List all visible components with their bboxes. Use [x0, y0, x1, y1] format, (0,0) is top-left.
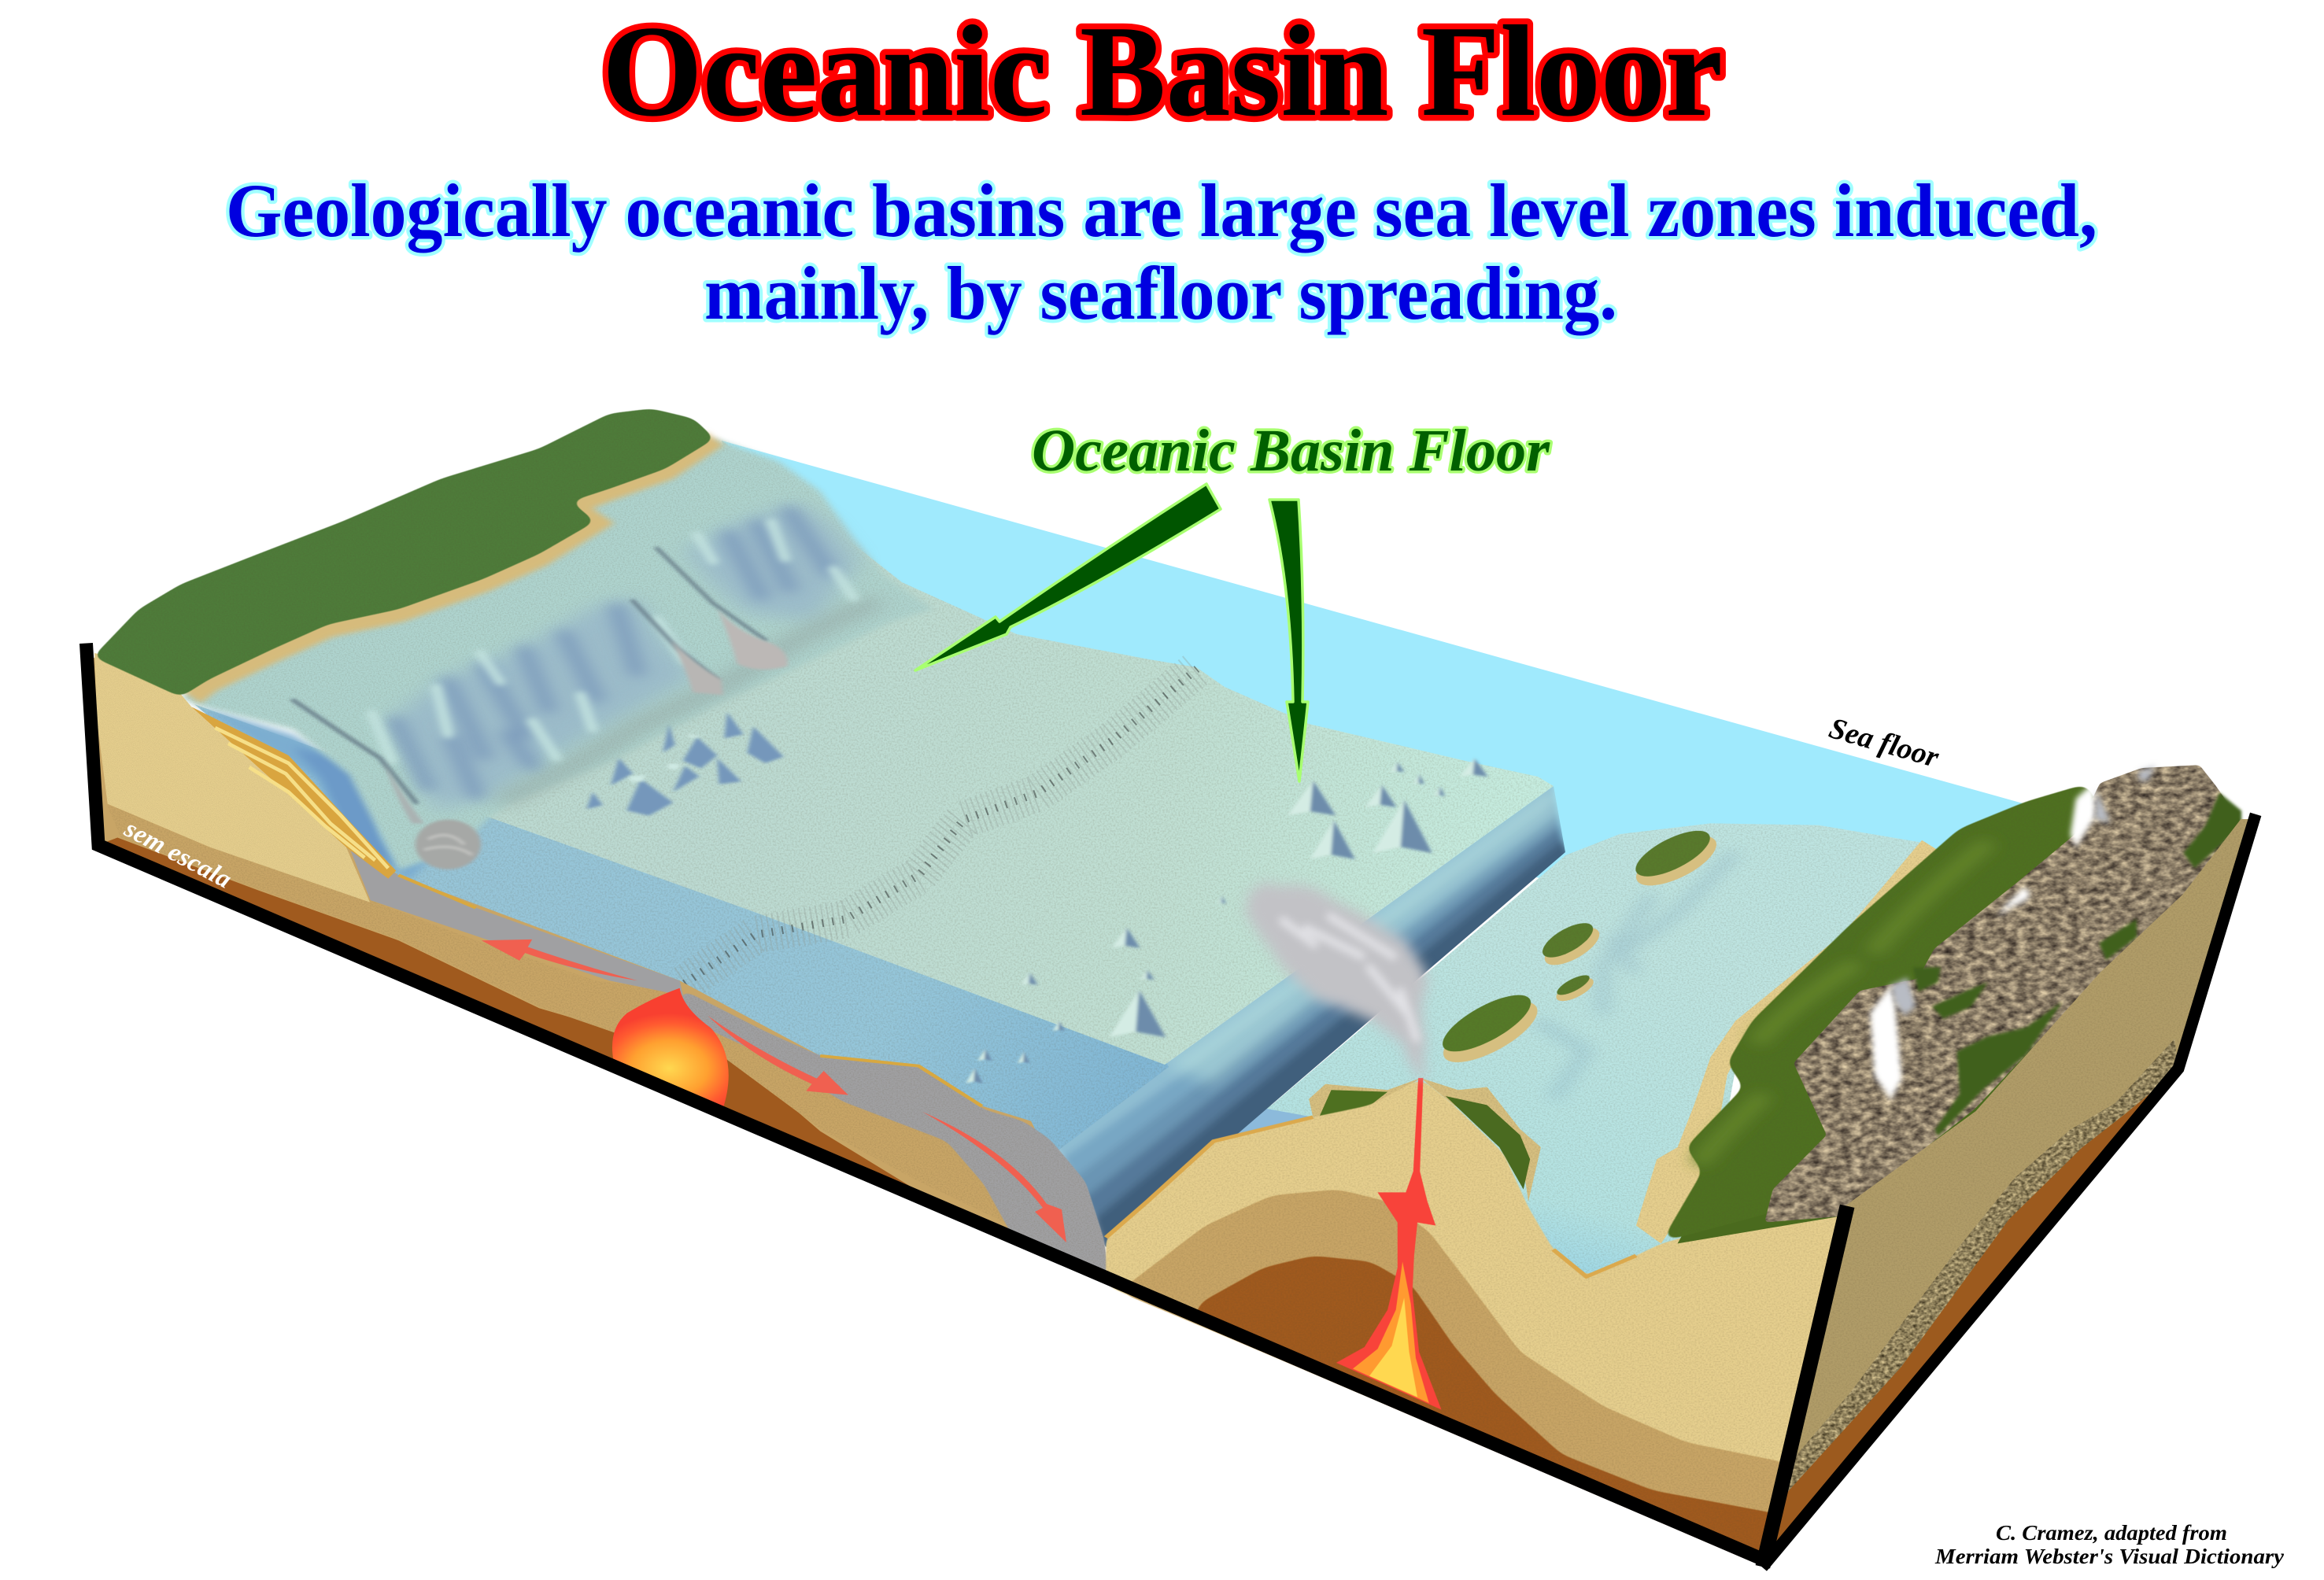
rock massif [1764, 765, 2241, 1223]
main title: Oceanic Basin Floor [602, 0, 1723, 143]
upper escarpment body [685, 504, 858, 619]
volcanic cross-section [1106, 1078, 1852, 1569]
island 1 [1620, 822, 1727, 895]
vegetation underlay [1678, 810, 2108, 1243]
arrow to basin plain [915, 484, 1221, 670]
tan crust right [715, 1031, 1015, 1227]
crust edge highlight [1106, 1117, 1636, 1276]
green land [93, 408, 715, 697]
continental shelf and slope [181, 438, 933, 870]
lower rise seamounts [966, 1021, 1065, 1083]
black block frame [87, 650, 2254, 1563]
snow shadows [1891, 766, 2156, 1016]
fan swirl [424, 835, 472, 855]
escarpment with gullies [294, 504, 878, 869]
cliff strip 5 [1093, 839, 1574, 1259]
left seamount cluster [586, 712, 783, 816]
magma conduit [1336, 1078, 1442, 1410]
beach strip [191, 438, 715, 697]
pale oceanic basin plain [483, 441, 1554, 1065]
canyon lines [294, 548, 765, 803]
olive sand face [1768, 819, 2253, 1551]
right basin seamounts [1021, 759, 1488, 1037]
right side face of block [1768, 819, 2253, 1553]
upper deep-sea fan [717, 608, 788, 670]
grey oceanic crust right [680, 988, 1109, 1277]
tan layer [1118, 1190, 1790, 1560]
brown mantle [1193, 1256, 1781, 1569]
speckled stratum [1785, 1039, 2178, 1500]
volcanic smoke plume [1246, 883, 1424, 1076]
left cross-section strata [93, 657, 1109, 1278]
brown mantle right [715, 1041, 918, 1199]
left coastal land [93, 408, 715, 697]
mountains [1764, 765, 2241, 1223]
sand wedge [94, 653, 370, 903]
subtitle line 2: mainly, by seafloor spreading. [704, 251, 1617, 335]
tan underlay [93, 657, 1109, 1278]
islands [1424, 822, 1727, 1072]
left sand wedge and sediment stripes [94, 653, 396, 903]
flow arrow far right [922, 1112, 1066, 1242]
cliff strip 2 [1061, 799, 1558, 1179]
dark blue basin patch [194, 704, 483, 881]
tan crust left [107, 805, 683, 1033]
shallow blue wedge [1217, 1108, 1329, 1141]
forest highlights [1702, 846, 1984, 1159]
cliff strip 3 [1072, 813, 1561, 1199]
magma core orange [1353, 1261, 1429, 1403]
mottled escarpment body [388, 598, 693, 810]
right coastal beach and vegetation [1636, 784, 2108, 1243]
base shadow of escarpment [501, 600, 878, 803]
mid-ocean ridge rift [685, 669, 1197, 984]
plateau cliff face [1039, 775, 1574, 1259]
arrow to seamounts [1269, 500, 1308, 781]
cliff strip 4 [1082, 825, 1563, 1220]
orange sediment band [191, 707, 396, 879]
beach [1636, 840, 1951, 1243]
snow caps [1870, 784, 2095, 1100]
credit line 2: Merriam Webster's Visual Dictionary [1934, 1545, 2285, 1568]
magma core yellow [1369, 1298, 1417, 1397]
brown stratum [1768, 1072, 2176, 1553]
pale cliff wash [1165, 786, 1562, 1084]
back water surface [722, 441, 2026, 928]
island 4 [1424, 986, 1551, 1072]
upland vegetation [1913, 792, 2241, 1136]
island 3 [1549, 972, 1598, 1005]
smoke highlights [1283, 917, 1417, 1039]
grey oceanic crust left [351, 851, 683, 995]
mountain details [1870, 766, 2241, 1136]
middle deep-sea fan [671, 640, 723, 695]
small near-shore land behind volcano [1309, 1078, 1541, 1202]
sediment cover on crust [398, 875, 982, 1106]
subtitle line 1: Geologically oceanic basins are large sea level zones induced, [226, 168, 2097, 253]
sand layer [1106, 1078, 1852, 1569]
seabed shadows around islands [1537, 852, 1735, 1099]
forest [1661, 784, 2100, 1242]
brown mantle left [98, 837, 620, 1069]
island 2 [1531, 917, 1608, 972]
pale sediment stripes [215, 728, 388, 868]
right sea with bay [1214, 823, 1926, 1289]
blue gullies [396, 511, 829, 795]
cliff strip 1 [1039, 775, 1556, 1159]
credit line 1: C. Cramez, adapted from [1996, 1521, 2227, 1545]
flow arrow left [482, 940, 637, 980]
deep blue inner patch [293, 748, 401, 869]
flow arrow right [708, 1016, 848, 1095]
lower deep-sea fan [416, 820, 481, 869]
seamount highlights [629, 734, 701, 781]
sea floor label: Sea floor [1826, 711, 1943, 774]
lower canyon channel [384, 763, 424, 824]
blue continental rise [194, 704, 1169, 1157]
pale gully ridges [371, 522, 854, 761]
oceanic basin floor label: Oceanic Basin Floor [1032, 418, 1550, 484]
magma chamber [612, 988, 729, 1112]
scale note: sem escala [119, 814, 236, 895]
